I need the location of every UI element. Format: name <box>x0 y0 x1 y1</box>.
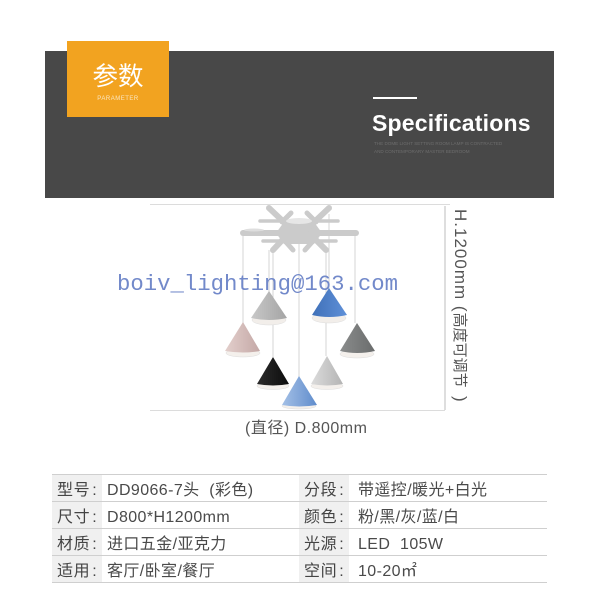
row 1 right: 分段: <box>304 482 344 499</box>
row 3 left: 进口五金/亚克力 <box>107 536 227 553</box>
dimension line: top <box>150 204 450 205</box>
watermark: email: boiv_lighting@163.com <box>117 271 398 297</box>
lamp: pink <box>225 322 260 357</box>
row 1 left: DD9066-7头 (彩色) <box>107 482 253 499</box>
row 1 left: 型号: <box>57 482 97 499</box>
row 4 left: 适用: <box>57 563 97 580</box>
ceiling canopy: snowflake <box>243 208 356 250</box>
lamp: blue bottom <box>282 376 317 409</box>
row 4 right: 空间: <box>304 563 344 580</box>
row 3 right <box>299 529 443 555</box>
row 2 left: D800*H1200mm <box>107 509 230 526</box>
heading: Specifications: Specifications <box>372 110 531 136</box>
panel: dark header <box>45 51 554 198</box>
row 4 left: 客厅/卧室/餐厅 <box>107 563 215 580</box>
label: diameter: (直径) D.800mm <box>245 420 367 437</box>
subtitle text: AND CONTEMPORARY MASTER BEDROOM <box>374 149 470 154</box>
subtitle text <box>374 141 502 154</box>
row 2 left <box>52 502 230 528</box>
lamp: dark gray <box>340 323 375 358</box>
row 3 right: LED 105W <box>358 536 443 553</box>
row 2 left: 尺寸: <box>57 509 97 526</box>
row 1 right: 带遥控/暖光+白光 <box>358 482 487 499</box>
dimension line: height <box>444 206 446 410</box>
row 4 left <box>52 556 215 582</box>
lamp: black <box>257 357 289 390</box>
row 2 right: 粉/黑/灰/蓝/白 <box>358 509 459 526</box>
badge: parameter <box>67 41 169 117</box>
label: height: H.1200mm ( 高度可调节 ) <box>451 209 470 402</box>
row 4 right: 10-20㎡ <box>358 563 417 580</box>
row 3 right: 光源: <box>304 536 344 553</box>
suspension wires <box>243 214 355 377</box>
badge title: 参数 <box>92 63 144 91</box>
row 2 right <box>299 502 459 528</box>
row lines <box>52 474 547 583</box>
lamp: blue top <box>312 288 347 323</box>
row 2 right: 颜色: <box>304 509 344 526</box>
row 1 right <box>299 475 487 501</box>
row 3 left: 材质: <box>57 536 97 553</box>
dimension line: bottom <box>150 410 445 411</box>
lamp: light gray <box>311 356 343 390</box>
accent rule <box>373 97 417 99</box>
row 1 left <box>52 475 253 501</box>
lamp: gray top <box>251 291 287 325</box>
subtitle text: THE DOME LIGHT SETTING ROOM LAMP IS CONTRACTED <box>374 141 502 146</box>
table: specifications <box>52 474 547 583</box>
row 4 right <box>299 556 417 582</box>
badge subtitle: PARAMETER <box>97 96 139 102</box>
row 3 left <box>52 529 227 555</box>
